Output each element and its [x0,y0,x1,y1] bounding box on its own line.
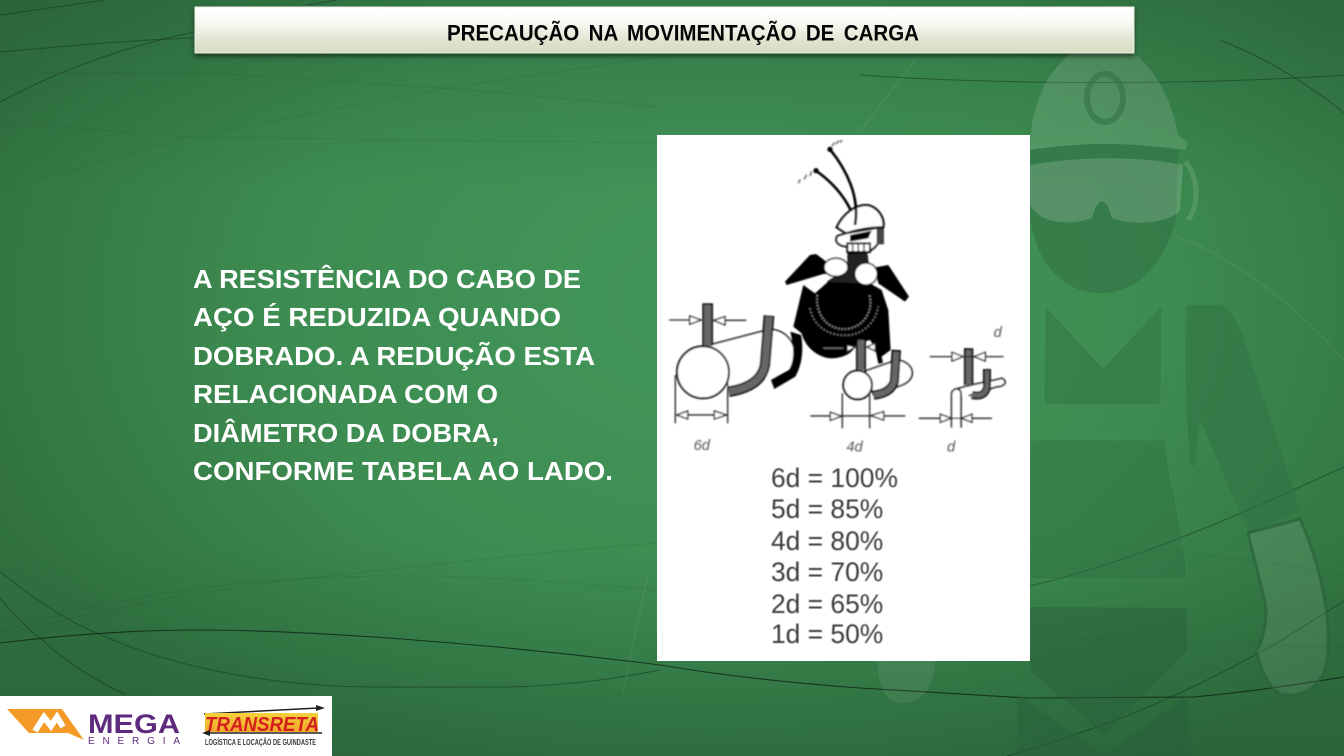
left glove [877,660,935,703]
6d bend [669,303,802,454]
table of reduction percentages: 4d = 80% [771,526,883,556]
d bend: d [947,440,956,456]
logo: Transreta: TRANSRETA [205,714,319,736]
vest top [1044,305,1162,405]
body text [193,264,613,486]
worker silhouette watermark [877,42,1328,756]
helmet lamp ring [1087,74,1123,122]
body text: DIÂMETRO DA DOBRA, [193,418,499,448]
logo: Mega Energia: MEGA [88,709,180,739]
logo: Transreta [202,705,325,747]
helmet [1030,42,1188,150]
title bar [195,7,1134,53]
table of reduction percentages: 5d = 85% [771,494,883,524]
table of reduction percentages: 6d = 100% [771,463,898,493]
vest middle [1030,440,1187,579]
d bend: d [994,325,1003,341]
insect worker figure [785,140,909,363]
d bend [919,325,1005,456]
table of reduction percentages: 3d = 70% [771,557,883,587]
logo: Mega Energia: ENERGIA [88,736,180,747]
logos strip [0,696,332,756]
goggles [1030,158,1183,223]
table of reduction percentages [771,463,898,649]
table of reduction percentages: 2d = 65% [771,589,883,619]
6d bend: 6d [694,438,711,454]
glove [1248,519,1328,695]
table of reduction percentages: 1d = 50% [771,619,883,649]
4d bend: 4d [846,440,863,456]
ear protector [1185,162,1196,220]
body text: DOBRADO. A REDUÇÃO ESTA [193,341,595,371]
vest lower [1030,607,1187,735]
arm [1186,305,1300,535]
logo: Mega Energia [7,709,180,747]
illustration: character and bent ropes [669,140,1005,456]
4d bend [810,338,912,456]
body text: AÇO É REDUZIDA QUANDO [193,302,561,332]
title text: PRECAUÇÃO NA MOVIMENTAÇÃO DE CARGA [447,20,919,46]
logo: Transreta: LOGÍSTICA E LOCAÇÃO DE GUINDASTE [205,738,316,747]
face [1030,144,1178,293]
body text: CONFORME TABELA AO LADO. [193,456,613,486]
panel: rope bending diagram and table [657,135,1030,661]
body text: RELACIONADA COM O [193,379,498,409]
body text: A RESISTÊNCIA DO CABO DE [193,264,581,294]
legs [1017,693,1192,756]
